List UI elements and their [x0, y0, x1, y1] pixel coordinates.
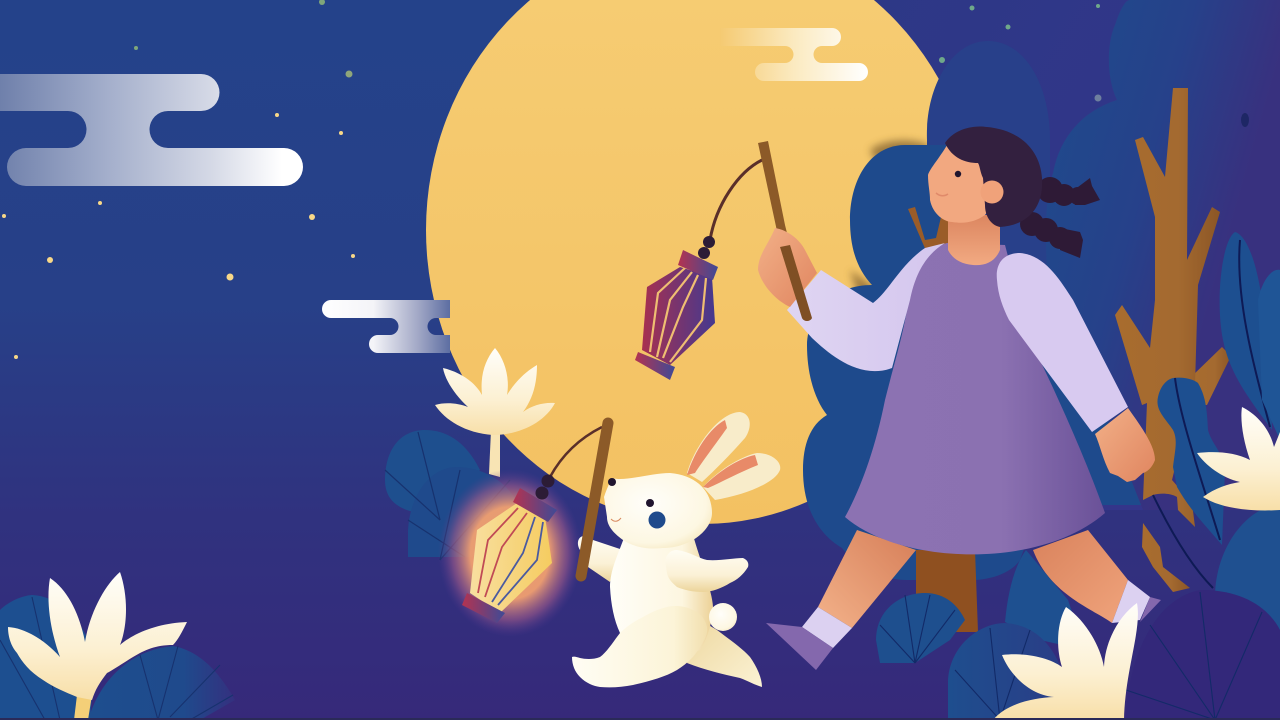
- rear leg: [687, 620, 762, 687]
- upper braid: [1037, 177, 1100, 206]
- leaf fan bottom left: [0, 595, 235, 720]
- right hand: [1095, 408, 1155, 482]
- left leg: [818, 530, 916, 628]
- stick over hand: [780, 245, 812, 321]
- tree trunk behind girl, upper branch: [908, 207, 950, 260]
- flower: bottom left: [8, 572, 187, 720]
- cloud: on moon: [720, 28, 868, 81]
- bush: left of girl: [803, 145, 1143, 580]
- bush shadow on moon: [850, 140, 930, 300]
- left shoe: [766, 623, 833, 670]
- smudge on bush: [1241, 113, 1249, 127]
- lantern cap: [678, 250, 718, 280]
- stars: [2, 0, 1102, 359]
- head: [604, 473, 712, 549]
- leaf fans middle: [385, 430, 520, 560]
- hair: [945, 126, 1042, 227]
- lantern: rabbit, glowing: [438, 427, 602, 637]
- ear: [980, 180, 1004, 204]
- cloud: large left: [0, 74, 303, 186]
- stick and lantern: girl: [635, 141, 790, 380]
- cloud: small middle: [322, 300, 450, 353]
- root piece: [1142, 523, 1190, 592]
- cap: [513, 488, 557, 522]
- right leg: [1033, 530, 1128, 623]
- leaf fans bottom right: [876, 550, 1280, 720]
- lantern base: [635, 352, 675, 380]
- right sleeve: [997, 253, 1128, 432]
- right lower branch: [1190, 347, 1231, 405]
- beads: [536, 474, 554, 500]
- base: [462, 593, 505, 623]
- glow: [438, 469, 582, 637]
- right sock: [1112, 580, 1150, 623]
- lantern ribs: [650, 268, 706, 362]
- stick: [581, 423, 608, 576]
- dark backdrop behind the moon on the right: [700, 0, 1280, 510]
- eye: [646, 499, 654, 507]
- bottom edge line: [0, 718, 1280, 720]
- main trunk: [1115, 88, 1220, 527]
- front leg: [572, 606, 707, 687]
- rabbit: [572, 412, 780, 687]
- lower braid: [1020, 212, 1083, 258]
- left sock: [802, 607, 852, 648]
- right arm: [665, 550, 748, 592]
- moon: [426, 0, 978, 524]
- tree right: [1115, 88, 1231, 592]
- dress: [845, 243, 1105, 554]
- stick upper: [758, 141, 790, 245]
- string: [550, 427, 602, 477]
- body: [610, 535, 713, 665]
- right shoe tip: [1140, 597, 1161, 622]
- ear two inner: [703, 455, 758, 488]
- flower: center on stem: [435, 348, 555, 477]
- body: [470, 503, 552, 613]
- flower: bottom right: [993, 603, 1138, 720]
- mouth: [936, 193, 948, 196]
- girl left hand: [758, 228, 817, 307]
- face: [928, 140, 992, 223]
- nose: [608, 478, 616, 486]
- flower: right: [1197, 407, 1280, 510]
- girl: [766, 126, 1161, 670]
- cheek: [648, 512, 666, 528]
- tree trunk behind girl, lower: [916, 550, 978, 632]
- bush: right large: [1046, 0, 1280, 510]
- eye: [955, 171, 961, 177]
- tail: [709, 603, 737, 631]
- lantern body: [642, 267, 715, 365]
- beads: [698, 236, 715, 259]
- neck: [948, 215, 1000, 265]
- left arm: [578, 536, 623, 582]
- ear one inner: [687, 420, 727, 475]
- smile: [611, 518, 621, 521]
- left sleeve: [787, 243, 945, 371]
- bush: top bump: [927, 41, 1050, 300]
- ear one: [687, 412, 750, 482]
- ear two: [703, 453, 780, 500]
- string: [710, 160, 762, 240]
- ribs: [478, 508, 543, 605]
- leaves right: [1153, 232, 1280, 630]
